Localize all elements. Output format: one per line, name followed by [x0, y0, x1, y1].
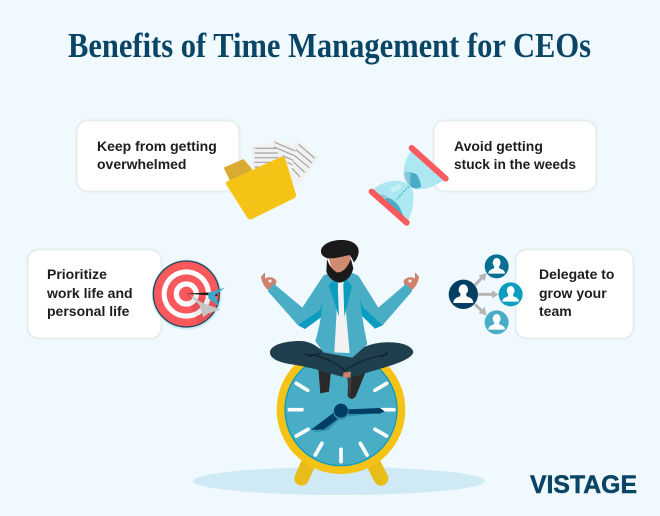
icon: target with dart	[152, 260, 225, 330]
illustration: man's legs and shoes	[270, 341, 413, 399]
icon: hourglass	[371, 148, 446, 224]
shirt	[334, 282, 350, 353]
card: delegate to grow your team: grow your	[539, 285, 607, 301]
arm shading	[298, 292, 326, 329]
shadow under clock	[193, 467, 485, 495]
hair	[321, 240, 359, 262]
jacket arms	[268, 273, 330, 329]
neck and face	[329, 254, 351, 274]
right hand	[403, 272, 419, 291]
card: delegate to grow your team: Delegate to	[539, 266, 614, 282]
card: prioritize work life and personal life: work life and	[46, 285, 133, 301]
card: keep from getting overwhelmed: overwhelmed	[97, 156, 186, 172]
icon: folder with papers	[224, 138, 319, 219]
card: delegate to grow your team	[516, 250, 634, 338]
card: keep from getting overwhelmed: Keep from getting	[97, 138, 217, 154]
jacket body	[315, 273, 367, 358]
card: prioritize work life and personal life	[28, 250, 162, 338]
illustration: alarm clock	[277, 345, 405, 478]
lapels	[329, 278, 339, 317]
logo: Vistage: VISTAGE	[530, 471, 637, 499]
icon: delegation network	[449, 254, 523, 334]
card: avoid getting stuck in the weeds	[434, 120, 596, 192]
card: delegate to grow your team: team	[539, 303, 572, 319]
card: keep from getting overwhelmed	[76, 120, 240, 192]
card: prioritize work life and personal life: Prioritize	[47, 266, 107, 282]
card: avoid getting stuck in the weeds: stuck in the weeds	[454, 156, 576, 172]
illustration: man's upper body	[261, 240, 419, 358]
card: avoid getting stuck in the weeds: Avoid getting	[454, 138, 543, 154]
left hand	[261, 272, 277, 291]
title: Benefits of Time Management for CEOs	[68, 27, 591, 65]
card: prioritize work life and personal life: personal life	[47, 303, 130, 319]
beard	[326, 259, 353, 283]
